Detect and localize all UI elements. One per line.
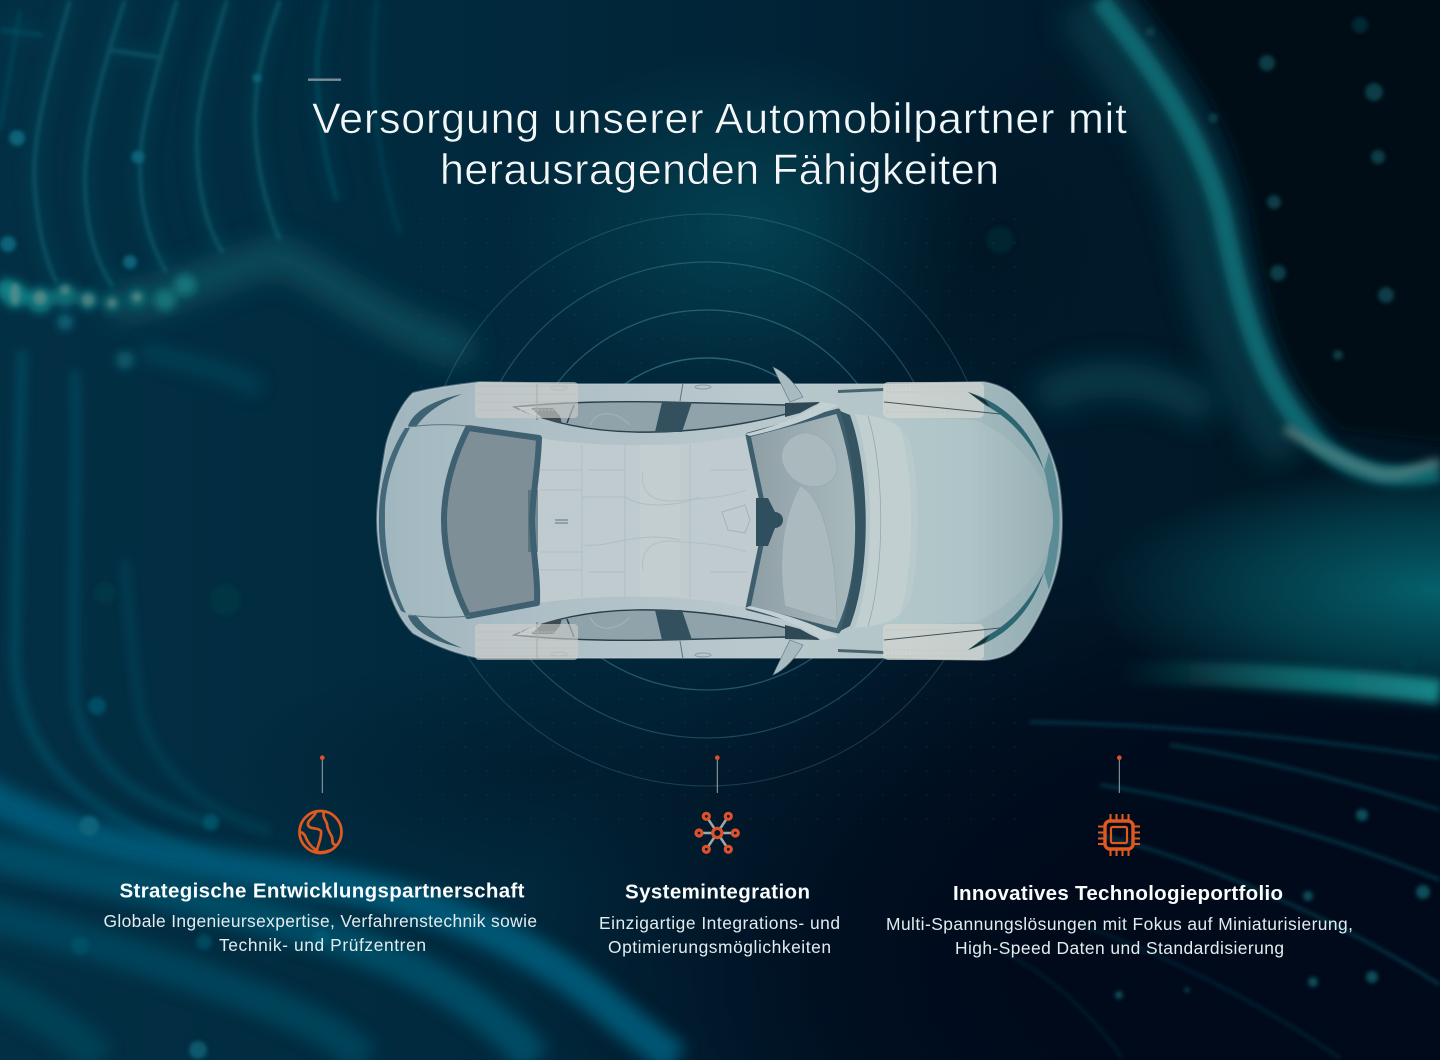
left vertical curves [0, 0, 400, 287]
pin [715, 755, 720, 793]
windshield dark stripe [840, 411, 866, 631]
bottom left bands [0, 790, 676, 1060]
rear edge stripe [379, 428, 410, 613]
front edge [1044, 452, 1060, 590]
left lower curves [15, 350, 270, 860]
upper right dark sky [1120, 0, 1440, 445]
heading: Strategische Entwicklungspartnerschaft [120, 880, 525, 902]
top side detail [408, 367, 1044, 470]
dashboard console [756, 498, 783, 546]
hood cowl stripe [855, 414, 911, 628]
left vertical curves halo [0, 0, 400, 287]
faint dot grid [420, 200, 1020, 820]
description [104, 911, 537, 955]
description [599, 913, 840, 957]
title: Versorgung unserer Automobilpartner mit [312, 95, 1127, 143]
description [886, 914, 1353, 958]
peach streak [1285, 428, 1440, 474]
pin [1117, 755, 1122, 793]
icon: network [696, 813, 738, 852]
rear window [444, 428, 539, 616]
title: herausragenden Fähigkeiten [440, 146, 999, 194]
right wave core [1100, 0, 1440, 476]
car body [377, 382, 1062, 660]
description: Optimierungsmöglichkeiten [608, 937, 831, 957]
windshield [748, 411, 858, 631]
pin [320, 755, 325, 793]
logo mark [555, 520, 568, 523]
particle streak left [0, 255, 470, 390]
heading: Systemintegration [625, 880, 810, 904]
cloud right of car [1040, 380, 1210, 412]
right wave fill [1090, 465, 1440, 715]
right wave wide glow [1085, 0, 1300, 445]
rear window inner ledge [528, 490, 538, 552]
title [308, 78, 1127, 194]
rear panel [390, 426, 470, 616]
heading: Innovatives Technologieportfolio [953, 882, 1283, 905]
bottom right thin curves [1000, 722, 1440, 1058]
description: Globale Ingenieursexpertise, Verfahrenstechnik sowie [104, 911, 537, 931]
description: High-Speed Daten und Standardisierung [955, 938, 1284, 958]
headrest and seat [782, 433, 837, 487]
icon: globe [300, 811, 342, 853]
description: Technik- und Prüfzentren [219, 935, 426, 955]
interior [532, 435, 768, 608]
right streak lower edge [1120, 672, 1440, 692]
description: Einzigartige Integrations- und [599, 913, 840, 933]
icon: chip [1098, 814, 1140, 856]
hood [860, 415, 1053, 627]
description: Multi-Spannungslösungen mit Fokus auf Miniaturisierung, [886, 914, 1353, 934]
bottom side detail [408, 572, 1044, 675]
